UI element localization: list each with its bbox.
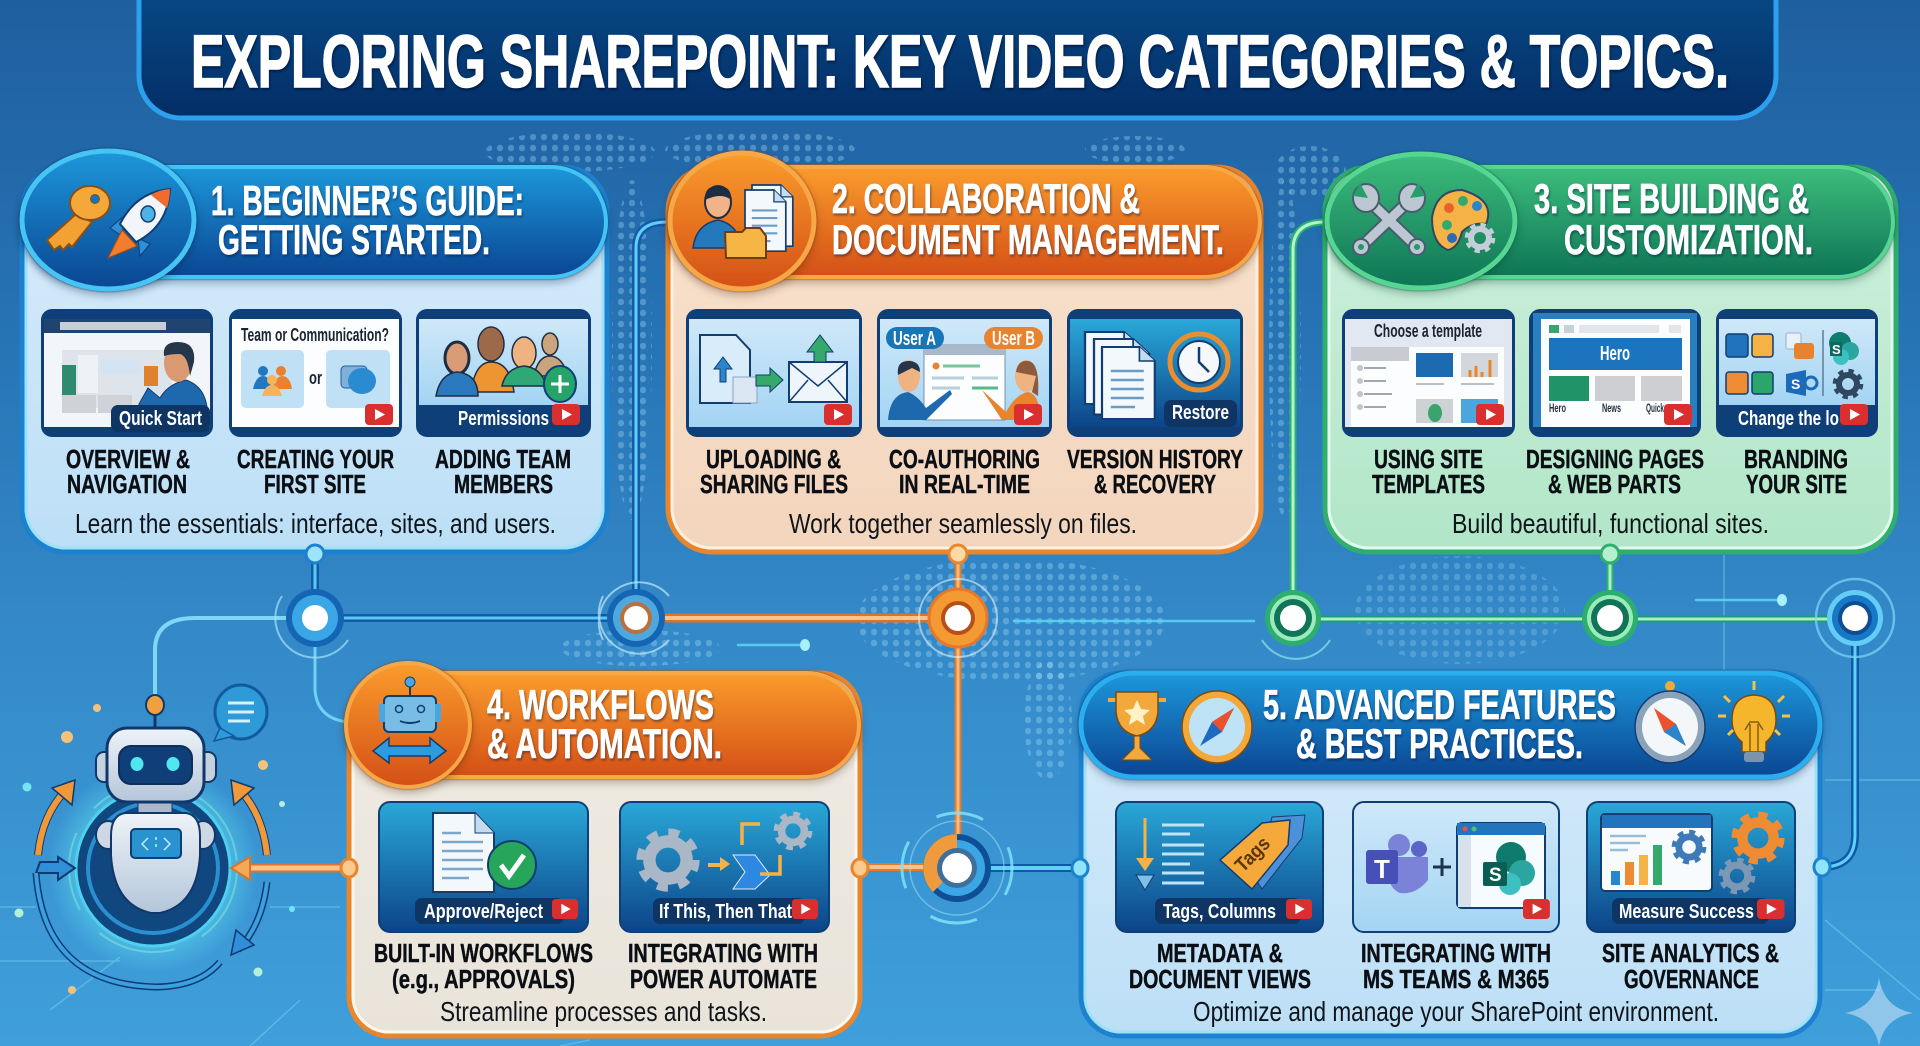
play button [1523,899,1550,919]
thumb title: Choose a template [1374,321,1482,341]
topic labels [1372,444,1848,499]
topic labels: UPLOADING & [706,444,841,474]
glow [48,763,258,973]
card [1325,167,1896,552]
hero block [1549,338,1682,370]
sharepoint logo small: S [1791,376,1800,392]
label pill [415,898,564,924]
topic labels: MS TEAMS & M365 [1363,964,1549,994]
user b tag [984,327,1043,350]
sparkle watermark [1845,978,1913,1046]
tile labels: Hero [1549,401,1566,415]
icon: crossed wrenches [1353,183,1425,255]
large gear [641,833,695,887]
ears [96,752,216,782]
label pill [1612,898,1769,924]
teams logo: T [1374,854,1390,884]
orange arrows [38,790,267,855]
panel 5: advanced features [1072,673,1830,1036]
frame [1067,309,1243,437]
video: team or communication [229,309,402,437]
video: approve reject [379,802,588,932]
icon: rocket [108,189,170,258]
play button [552,404,580,425]
video: co-authoring [877,309,1052,437]
header pill [1081,673,1820,777]
heading line 2: GETTING STARTED. [218,216,490,263]
sharepoint logo small [1786,370,1817,396]
visor [119,746,192,784]
node blue end [1816,579,1894,657]
plus sign [1433,858,1451,876]
panel 2: collaboration [668,153,1261,563]
topic labels: USING SITE [1374,444,1483,474]
play button [1014,404,1042,425]
settings gear [1835,371,1861,397]
sharepoint logo [1829,332,1859,365]
video: tags [1116,802,1323,932]
topic labels: CO-AUTHORING [889,444,1040,474]
screen [232,319,399,427]
robot illustration [14,685,295,994]
frame [1529,309,1701,437]
list lines [1162,825,1204,883]
ports [341,859,868,877]
antenna [146,695,164,730]
caption: Optimize and manage your SharePoint environment. [1193,996,1719,1027]
topic labels: INTEGRATING WITH [628,938,818,968]
play button [1476,404,1504,425]
add badge [544,366,576,402]
topic labels: SITE ANALYTICS & [1602,938,1779,968]
video: permissions [416,309,591,437]
frame [620,802,829,932]
topic labels: BUILT-IN WORKFLOWS [374,938,593,968]
icon: documents [745,185,793,251]
tile labels: Quick [1646,401,1664,415]
orange gear [1736,816,1780,860]
icon: gear [1467,225,1493,251]
node center bottom [902,813,1012,923]
ports [1072,858,1830,877]
toolbar [1549,325,1681,333]
frame [229,309,402,437]
frame [1342,309,1515,437]
people [436,327,568,396]
icon: person [693,186,742,248]
sharepoint logo: S [1489,865,1502,886]
play button [1840,404,1868,425]
divider [1822,330,1824,396]
card [22,167,607,552]
video: if this then that [620,802,829,932]
screen [880,319,1049,427]
check badge [488,841,536,889]
blue arcs [36,873,267,987]
dashboard window [1601,814,1712,891]
arrow heads [52,780,254,805]
frame [41,309,213,437]
orbit rings [69,784,237,952]
green arrow [756,368,783,392]
node green 1 [1262,590,1330,659]
topic labels: NAVIGATION [67,469,187,499]
topic labels [700,444,1243,499]
swatches [1726,334,1773,394]
head [107,728,204,802]
label pill [111,405,210,432]
video: teams and sharepoint [1353,802,1559,932]
icon: folder [725,228,766,258]
heading line 2: & BEST PRACTICES. [1296,720,1583,767]
topic labels: & WEB PARTS [1548,469,1681,499]
topic labels: METADATA & [1157,938,1283,968]
topic labels [1129,938,1779,994]
play button [1757,899,1784,919]
topic labels [374,938,818,994]
play button [552,899,578,919]
people icon [253,366,292,396]
user a tag: User A [893,328,936,350]
icon circle [1327,154,1515,288]
teams logo [1366,834,1428,893]
video: designing pages [1529,309,1701,437]
play button [365,404,393,425]
connector nodes [275,579,1894,923]
play button [824,404,852,425]
flow arrows [742,824,780,874]
connector lines [155,222,1855,868]
video: upload and share [686,309,862,437]
header pill [350,673,859,777]
user b person [982,360,1040,420]
user b tag: User B [992,328,1035,350]
arrow: panel 4 to robot [231,857,348,880]
small gear [777,815,809,847]
caption: Build beautiful, functional sites. [1452,508,1769,539]
topic labels: (e.g., APPROVALS) [392,964,575,994]
caption: Work together seamlessly on files. [789,508,1137,539]
pill text: Measure Success [1619,901,1754,923]
pill text: Tags, Columns [1163,901,1276,923]
heading line 2: & AUTOMATION. [487,720,722,767]
or text: or [309,368,322,388]
topic labels: MEMBERS [454,469,553,499]
heading line 2: CUSTOMIZATION. [1564,216,1813,263]
icon: light bulb [1718,681,1790,762]
screen [44,333,210,427]
topic labels: OVERVIEW & [66,444,190,474]
shared window [924,345,1005,420]
play button [792,899,818,919]
frame [1116,802,1323,932]
play button [1664,404,1692,425]
video: measure success [1587,802,1795,932]
play button [1286,899,1312,919]
topic labels: CREATING YOUR [237,444,394,474]
frame [416,309,591,437]
topic labels: INTEGRATING WITH [1361,938,1551,968]
card [668,167,1261,552]
topic labels [66,444,571,499]
document [700,335,750,403]
user a person [888,360,952,420]
icon: trophy [1108,692,1166,760]
header pill [1328,167,1893,277]
video: site templates [1342,309,1515,437]
blue arrow head [231,930,254,955]
topic labels: BRANDING [1744,444,1848,474]
heading: 1. BEGINNER’S GUIDE: [211,177,524,224]
tile labels: News [1602,401,1621,415]
screen [1541,319,1690,427]
hero text: Hero [1600,343,1630,365]
icon circle [346,663,470,787]
arrow [708,857,730,871]
video: restore [1067,309,1243,437]
screen [689,319,859,427]
heading: 2. COLLABORATION & [832,175,1140,222]
cursor box [733,377,757,403]
arms [96,821,215,849]
icon circle [670,153,814,289]
heading line 2: DOCUMENT MANAGEMENT. [832,216,1224,263]
chest screen [131,829,181,858]
topic labels: ADDING TEAM [435,444,571,474]
tag [1220,820,1290,889]
window gear [1674,832,1704,862]
envelope [789,362,847,402]
caption: Learn the essentials: interface, sites, and users. [75,508,556,539]
heading: 3. SITE BUILDING & [1534,175,1809,222]
topic labels: VERSION HISTORY [1067,444,1243,474]
neck [138,803,172,813]
video: branding [1716,309,1878,437]
icon: stopwatch compass [1635,681,1705,763]
template tiles [1416,353,1498,423]
icon: key [47,186,110,250]
icon: double arrow [373,738,446,763]
presenter [139,342,207,407]
sharepoint logo [1483,842,1535,895]
screen [1070,319,1240,427]
browser bar [44,319,210,333]
frame [1716,309,1878,437]
pill text: Permissions [458,408,549,430]
template list [1351,347,1504,427]
option communication [326,350,390,408]
screen [1719,319,1875,405]
icon: palette [1432,190,1488,250]
port [306,545,324,563]
document [433,813,494,892]
frame [1353,802,1559,932]
topic labels: & RECOVERY [1094,469,1216,499]
video: quick start [41,309,213,437]
banner shape [139,0,1776,118]
documents [1085,332,1155,419]
node green 2 [1582,590,1638,646]
topic labels: FIRST SITE [264,469,366,499]
world map dots [485,130,1565,780]
label pill [653,898,805,924]
tile labels [1549,401,1664,415]
thumb title: Team or Communication? [241,325,389,345]
icon circle [22,151,194,289]
sort arrow [1136,818,1154,890]
port [949,545,967,563]
page content [62,350,172,413]
heading: 5. ADVANCED FEATURES [1263,681,1616,728]
sharepoint logo: S [1832,342,1841,357]
node mixed [599,582,669,654]
pill text: If This, Then That [659,901,792,923]
frame [1587,802,1795,932]
bezel [1533,313,1697,427]
panel 3: site building [1325,154,1896,563]
pill text: Restore [1172,402,1229,424]
card [1081,673,1820,1036]
accent dots on lines [800,594,1787,651]
topic labels: IN REAL-TIME [899,469,1030,499]
port [1601,545,1619,563]
pill text: Quick Start [119,408,202,430]
eyes [130,757,180,771]
header pill [670,167,1260,277]
topic labels: GOVERNANCE [1624,964,1759,994]
option team [241,350,304,408]
label pill [1155,898,1301,924]
panel 1: beginner's guide [22,151,607,563]
topic labels: YOUR SITE [1746,469,1847,499]
body [111,813,200,913]
title banner [139,0,1776,118]
user a tag [886,327,944,350]
sharepoint window [1457,823,1545,908]
small gear [1722,861,1752,891]
clock [1170,334,1228,390]
frame [877,309,1052,437]
topic labels: SHARING FILES [700,469,848,499]
node orange [919,579,997,657]
chat icon [341,366,376,394]
heading: 4. WORKFLOWS [487,681,714,728]
topic labels: TEMPLATES [1372,469,1485,499]
faint circuit lines [0,555,1920,1046]
left blue arrow [36,857,75,880]
screen [1345,319,1512,427]
panel 4: workflows [341,663,868,1036]
tiles [1549,376,1682,401]
label pill [1164,400,1237,427]
frame [379,802,588,932]
header pill [24,167,606,277]
green up arrow [807,335,833,362]
chat bubble [214,685,267,741]
topic labels: DOCUMENT VIEWS [1129,964,1311,994]
caption: Streamline processes and tasks. [440,996,767,1027]
automate icon [733,855,770,889]
node blue 1 [275,589,348,658]
topic labels: DESIGNING PAGES [1526,444,1704,474]
pill text: Approve/Reject [424,901,543,923]
card [349,673,860,1036]
icon: mini robot [379,677,441,732]
floating particles [14,704,295,994]
screen [419,319,588,405]
topic labels: POWER AUTOMATE [630,964,817,994]
orange arrow shafts [38,790,267,855]
frame [686,309,862,437]
overlapping squares [1786,333,1814,359]
tag text: Tags [1231,833,1275,877]
pill text: Change the lo [1738,408,1839,430]
icon: compass [1182,691,1252,763]
tag behind [1256,815,1305,889]
up arrow [714,357,732,382]
